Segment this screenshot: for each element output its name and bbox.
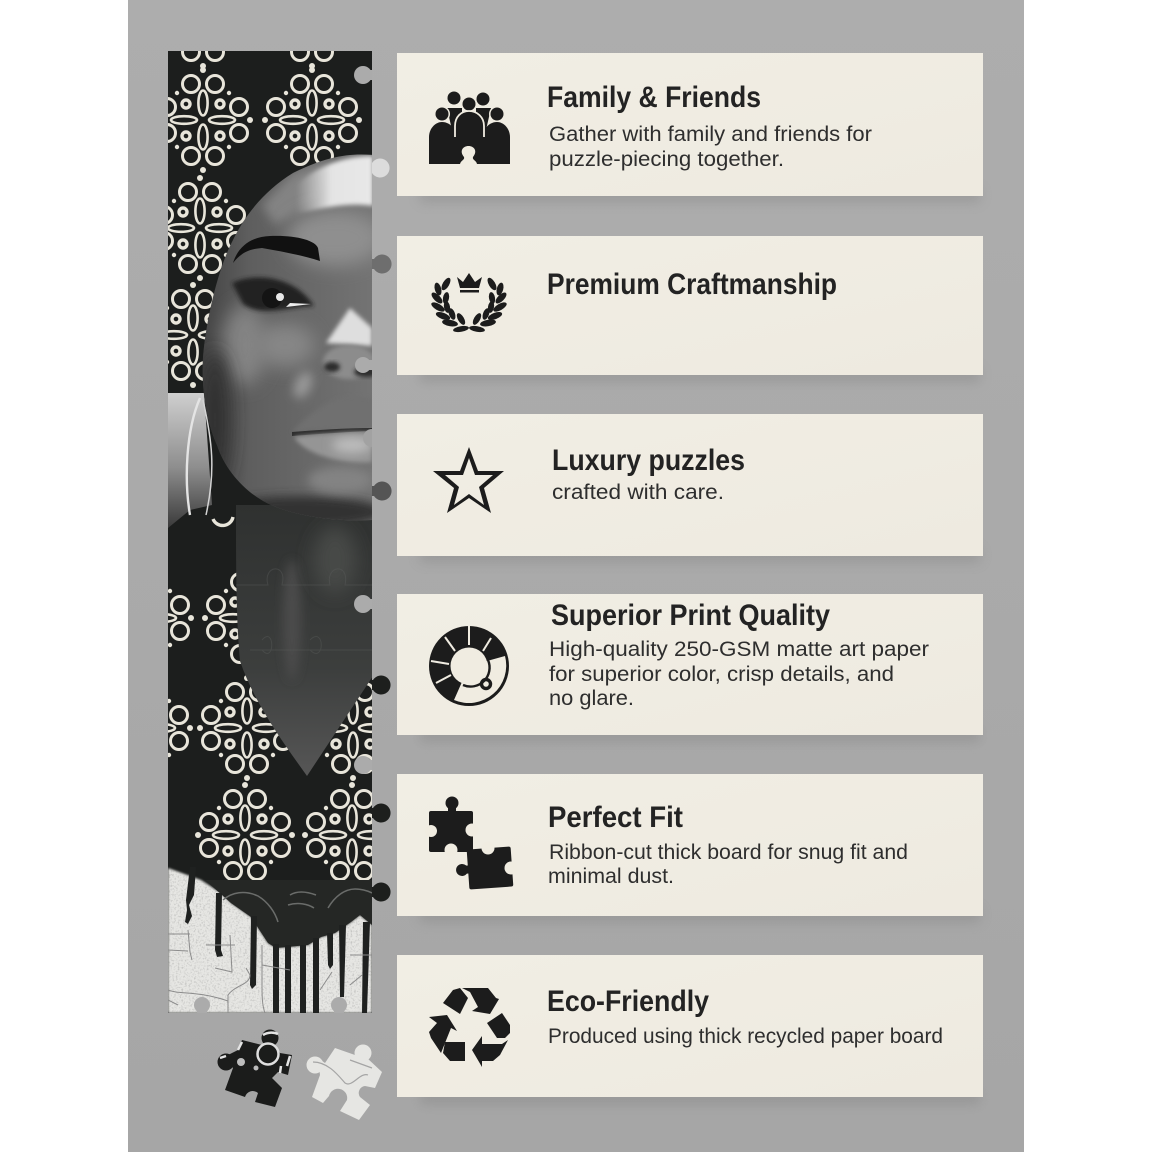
description — [549, 637, 929, 710]
description: crafted with care. — [552, 480, 724, 504]
heading: Superior Print Quality — [551, 599, 830, 632]
description — [549, 122, 872, 171]
icon: crown and laurel wreath — [430, 273, 508, 333]
card shadows — [420, 188, 980, 1104]
card: Premium Craftmanship — [397, 236, 983, 375]
description: minimal dust. — [548, 864, 674, 888]
icon: print colour wheel — [429, 626, 509, 706]
neck — [236, 505, 373, 776]
card: Perfect Fit — [397, 774, 983, 916]
heading: Perfect Fit — [548, 801, 683, 834]
icon: recycling arrows — [429, 988, 510, 1067]
panel: puzzle strip portrait — [168, 51, 392, 1013]
description — [548, 840, 908, 888]
description: no glare. — [549, 686, 634, 710]
description: Gather with family and friends for — [549, 122, 872, 146]
pattern: white lace motifs — [168, 51, 390, 1070]
description: Ribbon-cut thick board for snug fit and — [549, 840, 908, 864]
icon: star outline — [433, 447, 504, 513]
loose white puzzle piece — [306, 1044, 382, 1120]
description: for superior color, crisp details, and — [549, 662, 894, 686]
description: High-quality 250-GSM matte art paper — [549, 637, 929, 661]
heading: Luxury puzzles — [552, 444, 745, 477]
eyebrow — [233, 236, 320, 263]
eye — [232, 277, 314, 311]
card: Luxury puzzles — [397, 414, 983, 556]
loose black puzzle piece — [218, 1030, 292, 1107]
card: Superior Print Quality — [397, 594, 983, 735]
card: Eco-Friendly — [397, 955, 983, 1097]
knobs on the strip's right edge — [372, 158, 392, 902]
face — [202, 154, 372, 520]
icon: family group with puzzle notch — [429, 92, 510, 164]
ear and earring — [168, 393, 212, 528]
notches — [194, 66, 373, 1014]
drip zone: white cracked wall — [168, 867, 372, 1013]
description: puzzle-piecing together. — [549, 147, 784, 171]
card: Family & Friends — [397, 53, 983, 196]
description: Produced using thick recycled paper board — [548, 1024, 943, 1048]
heading: Eco-Friendly — [547, 985, 709, 1018]
heading: Premium Craftmanship — [547, 268, 837, 301]
icon: two puzzle pieces — [425, 796, 518, 890]
gray panel — [128, 0, 1024, 1152]
heading: Family & Friends — [547, 81, 761, 114]
